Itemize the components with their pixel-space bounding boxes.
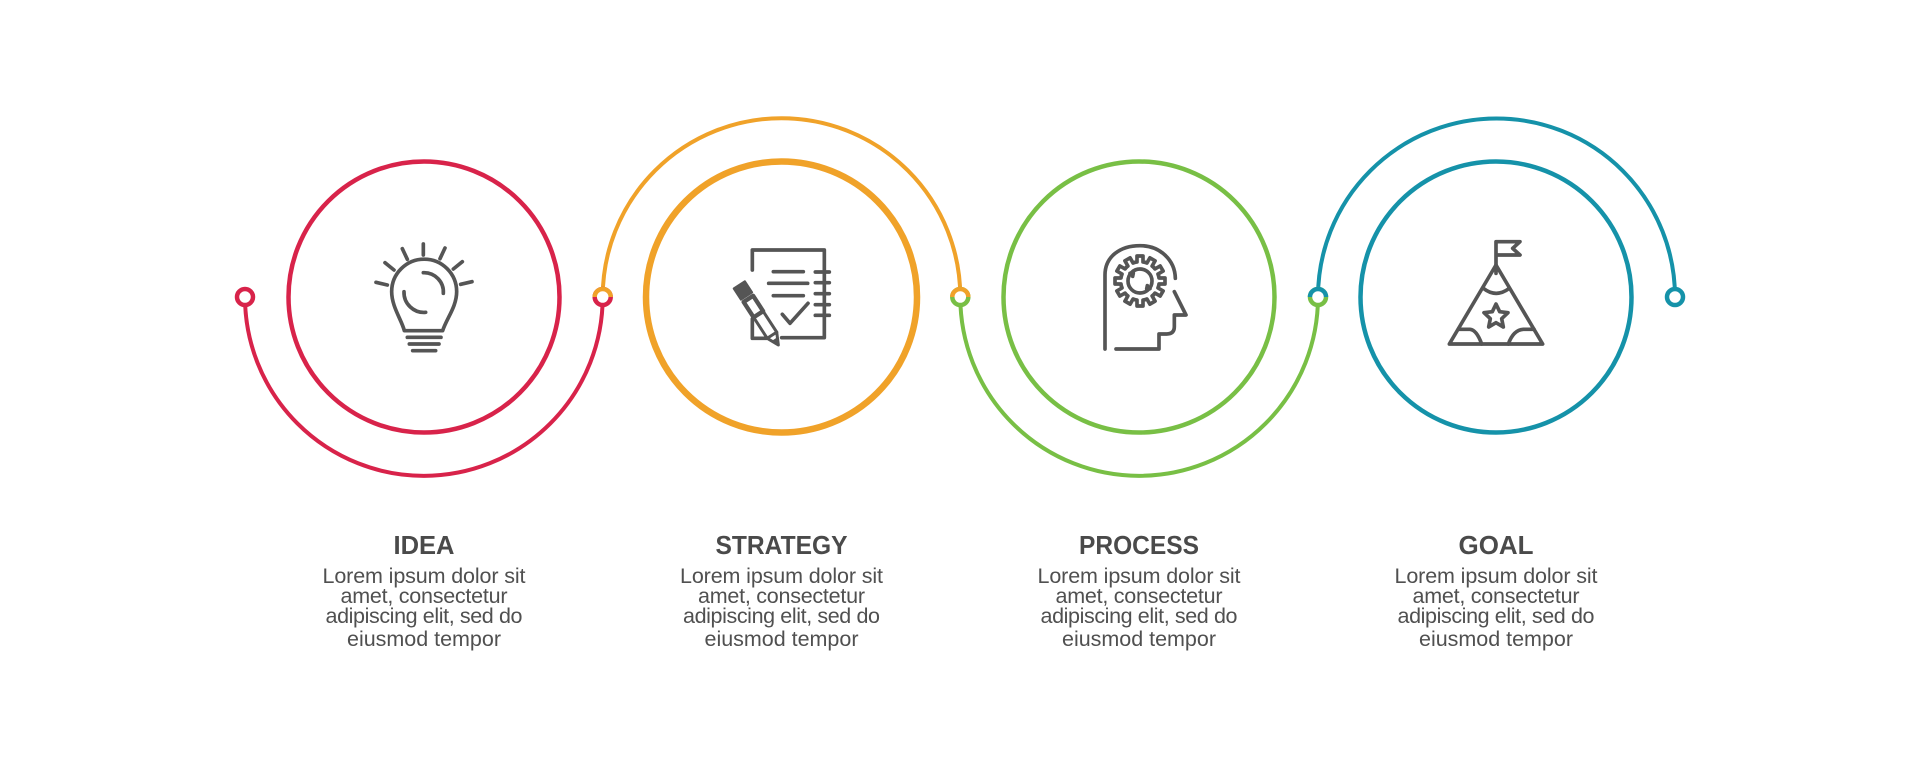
text block: process description bbox=[1038, 564, 1241, 651]
text block: goal description bbox=[1394, 564, 1598, 651]
text block: idea description bbox=[322, 564, 526, 651]
node: green and teal bbox=[1310, 289, 1326, 305]
connector nodes bbox=[237, 289, 1683, 305]
icon: notebook and pen bbox=[734, 250, 829, 349]
red connector arc bbox=[245, 297, 603, 476]
icon: mountain with flag bbox=[1449, 242, 1543, 344]
text block: goal description: adipiscing elit, sed do bbox=[1398, 604, 1595, 628]
heading: strategy: STRATEGY bbox=[716, 530, 848, 560]
red circle bbox=[288, 162, 560, 432]
green connector arc bbox=[960, 297, 1318, 476]
text block: process description: adipiscing elit, sed do bbox=[1040, 604, 1238, 628]
icon: head with gear bbox=[1105, 246, 1186, 349]
orange circle bbox=[646, 162, 917, 432]
text block: goal description: amet, consectetur bbox=[1412, 584, 1580, 608]
panel: goal bbox=[1318, 119, 1675, 651]
text block: idea description: adipiscing elit, sed do bbox=[326, 604, 523, 628]
text block: process description: amet, consectetur bbox=[1056, 584, 1222, 608]
text block: strategy description: eiusmod tempor bbox=[704, 627, 858, 651]
text block: process description: eiusmod tempor bbox=[1062, 627, 1216, 651]
teal circle bbox=[1360, 162, 1632, 432]
icon: light bulb bbox=[376, 244, 472, 351]
text block: idea description: amet, consectetur bbox=[340, 584, 508, 608]
node: start red bbox=[237, 289, 253, 305]
panel: strategy bbox=[603, 118, 960, 651]
panel: process bbox=[960, 162, 1318, 651]
panel: idea bbox=[245, 162, 603, 651]
text block: strategy description: amet, consectetur bbox=[698, 584, 865, 608]
text block: idea description: eiusmod tempor bbox=[347, 627, 501, 651]
text block: goal description: Lorem ipsum dolor sit bbox=[1394, 564, 1598, 588]
text block: idea description: Lorem ipsum dolor sit bbox=[322, 564, 526, 588]
node: orange and green bbox=[952, 289, 968, 305]
text block: process description: Lorem ipsum dolor sit bbox=[1038, 564, 1241, 588]
text block: strategy description: Lorem ipsum dolor sit bbox=[680, 564, 883, 588]
text block: goal description: eiusmod tempor bbox=[1419, 627, 1573, 651]
text block: strategy description: adipiscing elit, sed do bbox=[683, 604, 880, 628]
text block: strategy description bbox=[680, 564, 883, 651]
heading: idea: IDEA bbox=[394, 530, 455, 560]
green circle bbox=[1004, 162, 1274, 432]
heading: goal: GOAL bbox=[1458, 530, 1534, 560]
heading: process: PROCESS bbox=[1079, 530, 1199, 560]
node: end teal bbox=[1667, 289, 1683, 305]
orange connector arc bbox=[603, 118, 960, 297]
teal connector arc bbox=[1318, 119, 1675, 297]
node: red and orange bbox=[595, 289, 611, 305]
